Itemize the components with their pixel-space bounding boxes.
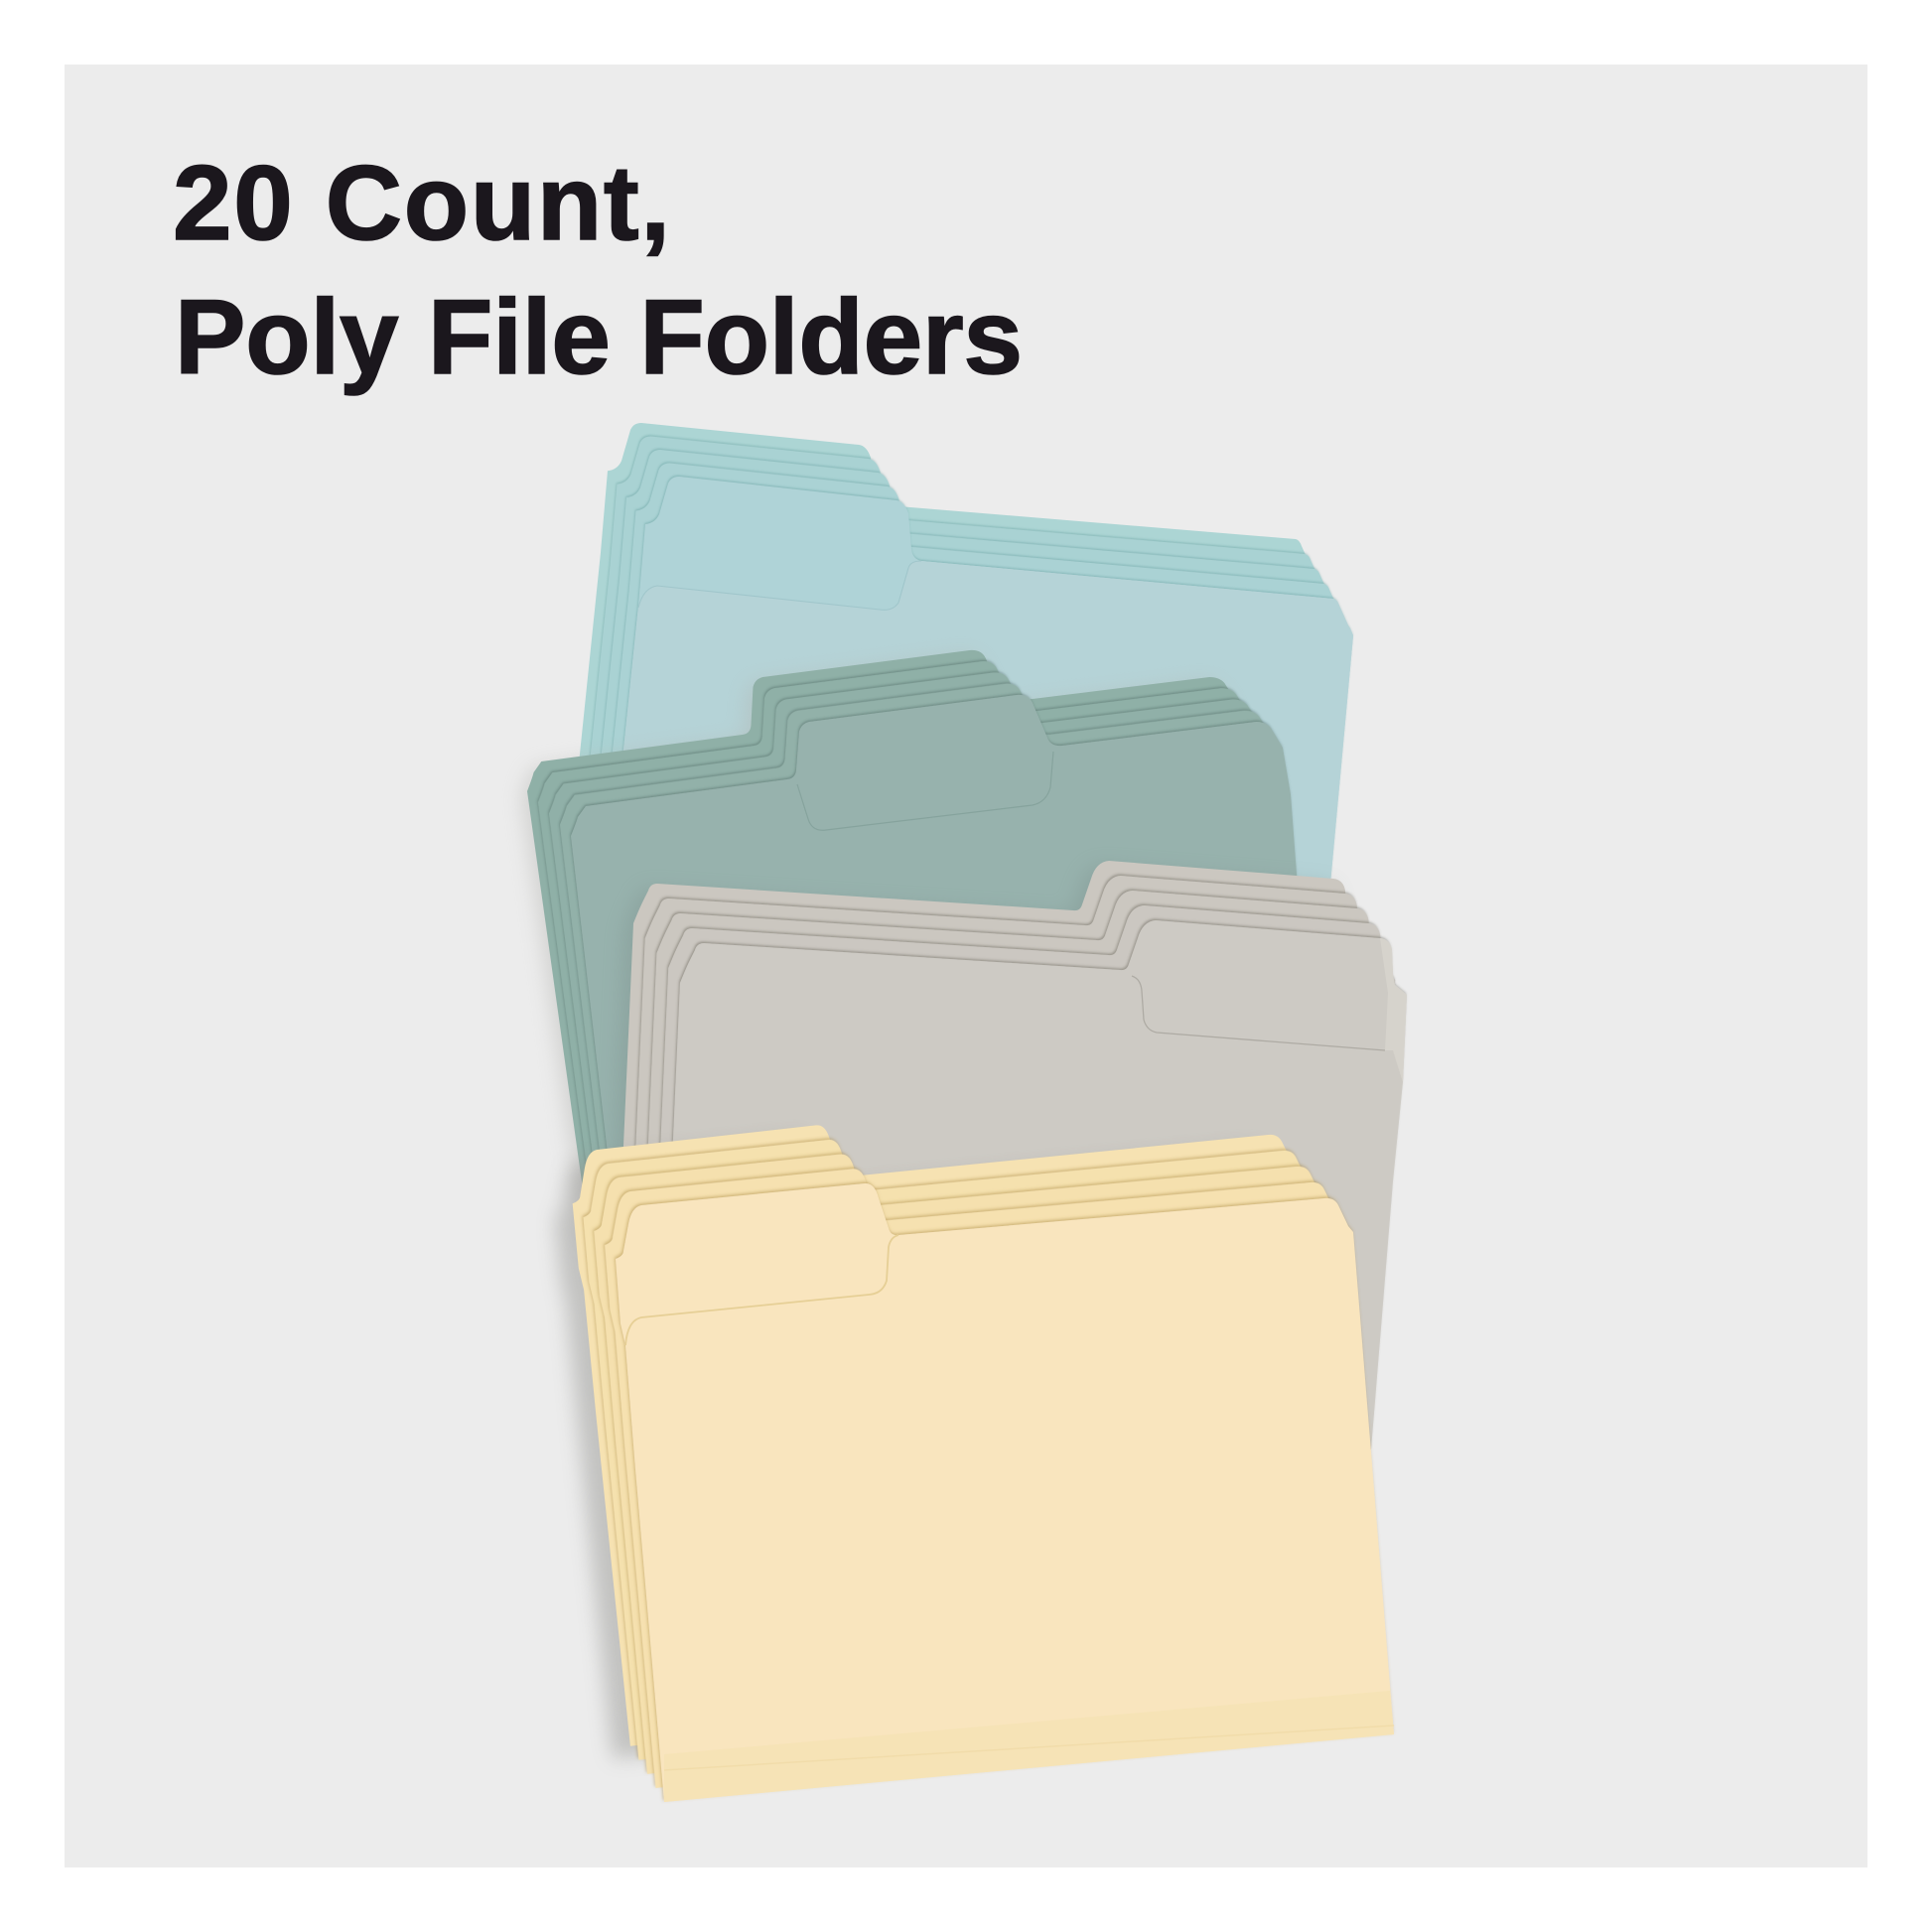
yellow tab crease	[625, 1235, 898, 1345]
yellow flap fold line	[664, 1725, 1394, 1770]
title: 20 Count,	[173, 143, 670, 262]
green tab crease	[797, 752, 1053, 830]
green stack shadow	[518, 655, 1264, 1251]
title: Poly File Folders	[175, 277, 1023, 396]
yellow bottom flap	[664, 1691, 1394, 1802]
stack: yellow folders	[553, 1119, 1394, 1802]
title	[173, 143, 1023, 396]
grey stack shadow	[604, 866, 1351, 1395]
grey tab crease	[1132, 976, 1385, 1050]
stack: blue folders	[571, 417, 1353, 894]
grey right translucent strip	[1380, 938, 1407, 1082]
stack: grey folders	[604, 861, 1407, 1449]
blue front panel	[609, 561, 1353, 894]
stack: green folders	[518, 650, 1303, 1291]
blue tab crease	[638, 561, 921, 610]
yellow stack shadow	[553, 1132, 1329, 1759]
